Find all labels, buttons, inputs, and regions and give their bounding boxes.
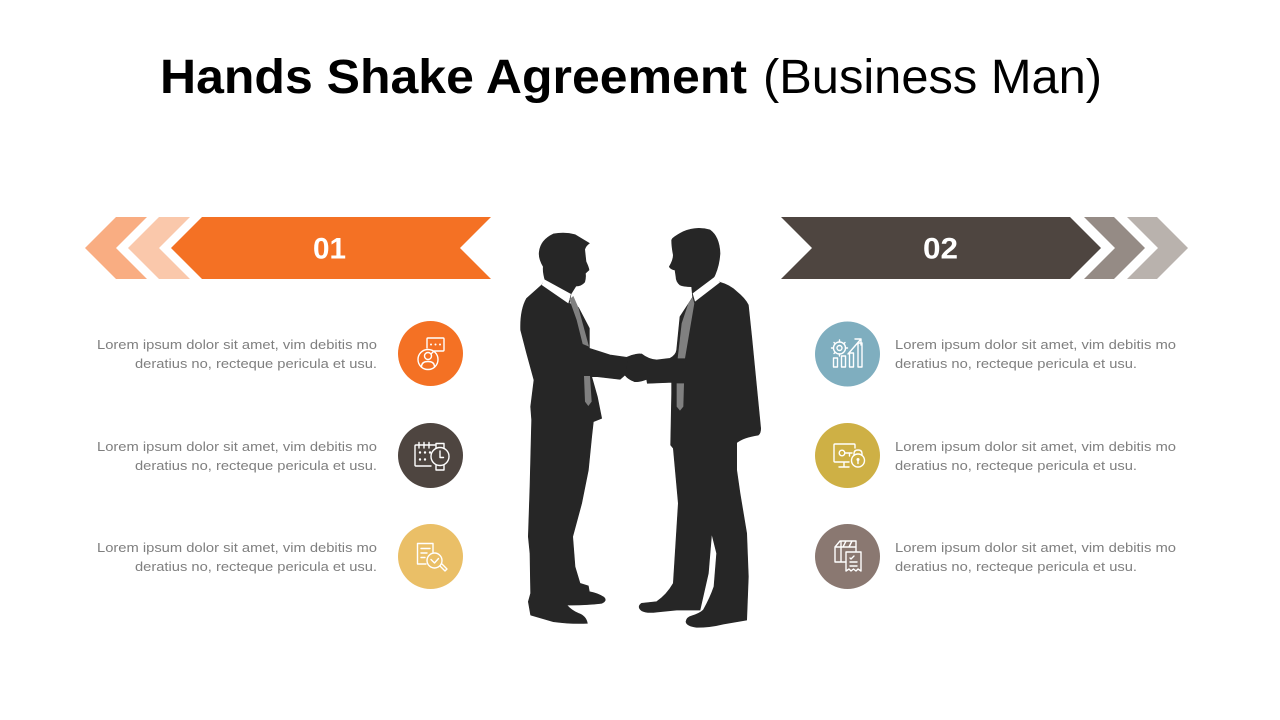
text block: left 1: deratius no, recteque pericula et usu. xyxy=(135,356,377,371)
text block: right 1: Lorem ipsum dolor sit amet, vim debitis mo xyxy=(895,337,1176,352)
banner: 01 orange arrow: 01 xyxy=(313,232,346,266)
right man tie xyxy=(677,297,694,411)
text block: left 1 xyxy=(97,337,377,371)
icon: boxes and receipt xyxy=(815,524,880,589)
text block: right 1: deratius no, recteque pericula et usu. xyxy=(895,356,1137,371)
text block: left 3: Lorem ipsum dolor sit amet, vim debitis mo xyxy=(97,540,377,555)
text block: left 2 xyxy=(97,439,377,473)
text block: left 3: deratius no, recteque pericula et usu. xyxy=(135,559,377,574)
text block: left 3 xyxy=(97,540,377,574)
text block: left 2: deratius no, recteque pericula et usu. xyxy=(135,458,377,473)
text block: left 2: Lorem ipsum dolor sit amet, vim debitis mo xyxy=(97,439,377,454)
left man silhouette xyxy=(521,233,648,623)
banner: 02 brown arrow xyxy=(781,217,1188,279)
left man collar xyxy=(542,279,571,303)
text block: right 2: Lorem ipsum dolor sit amet, vim debitis mo xyxy=(895,439,1176,454)
text block: right 3: deratius no, recteque pericula et usu. xyxy=(895,559,1137,574)
icon: document with magnifier xyxy=(398,524,463,589)
left man tie xyxy=(569,296,592,406)
text block: right 2 xyxy=(895,439,1176,473)
title: (Business Man) xyxy=(763,51,1102,104)
title: Hands Shake Agreement xyxy=(160,51,747,104)
text block: right 2: deratius no, recteque pericula et usu. xyxy=(895,458,1137,473)
banner: 02 brown arrow: 02 xyxy=(923,232,958,266)
icon: gear and growth chart xyxy=(815,322,880,386)
right man collar xyxy=(693,277,720,302)
text block: left 1: Lorem ipsum dolor sit amet, vim debitis mo xyxy=(97,337,377,352)
title xyxy=(160,51,1102,104)
banner: 01 orange arrow xyxy=(85,217,491,279)
illustration: two businessmen shaking hands xyxy=(521,228,761,627)
text block: right 3: Lorem ipsum dolor sit amet, vim debitis mo xyxy=(895,540,1176,555)
text block: right 3 xyxy=(895,540,1176,574)
right man silhouette xyxy=(625,228,761,627)
icon: calendar and watch xyxy=(398,423,463,488)
icon: monitor with key and padlock xyxy=(815,423,880,488)
icon: person with speech bubble xyxy=(398,321,463,386)
text block: right 1 xyxy=(895,337,1176,371)
